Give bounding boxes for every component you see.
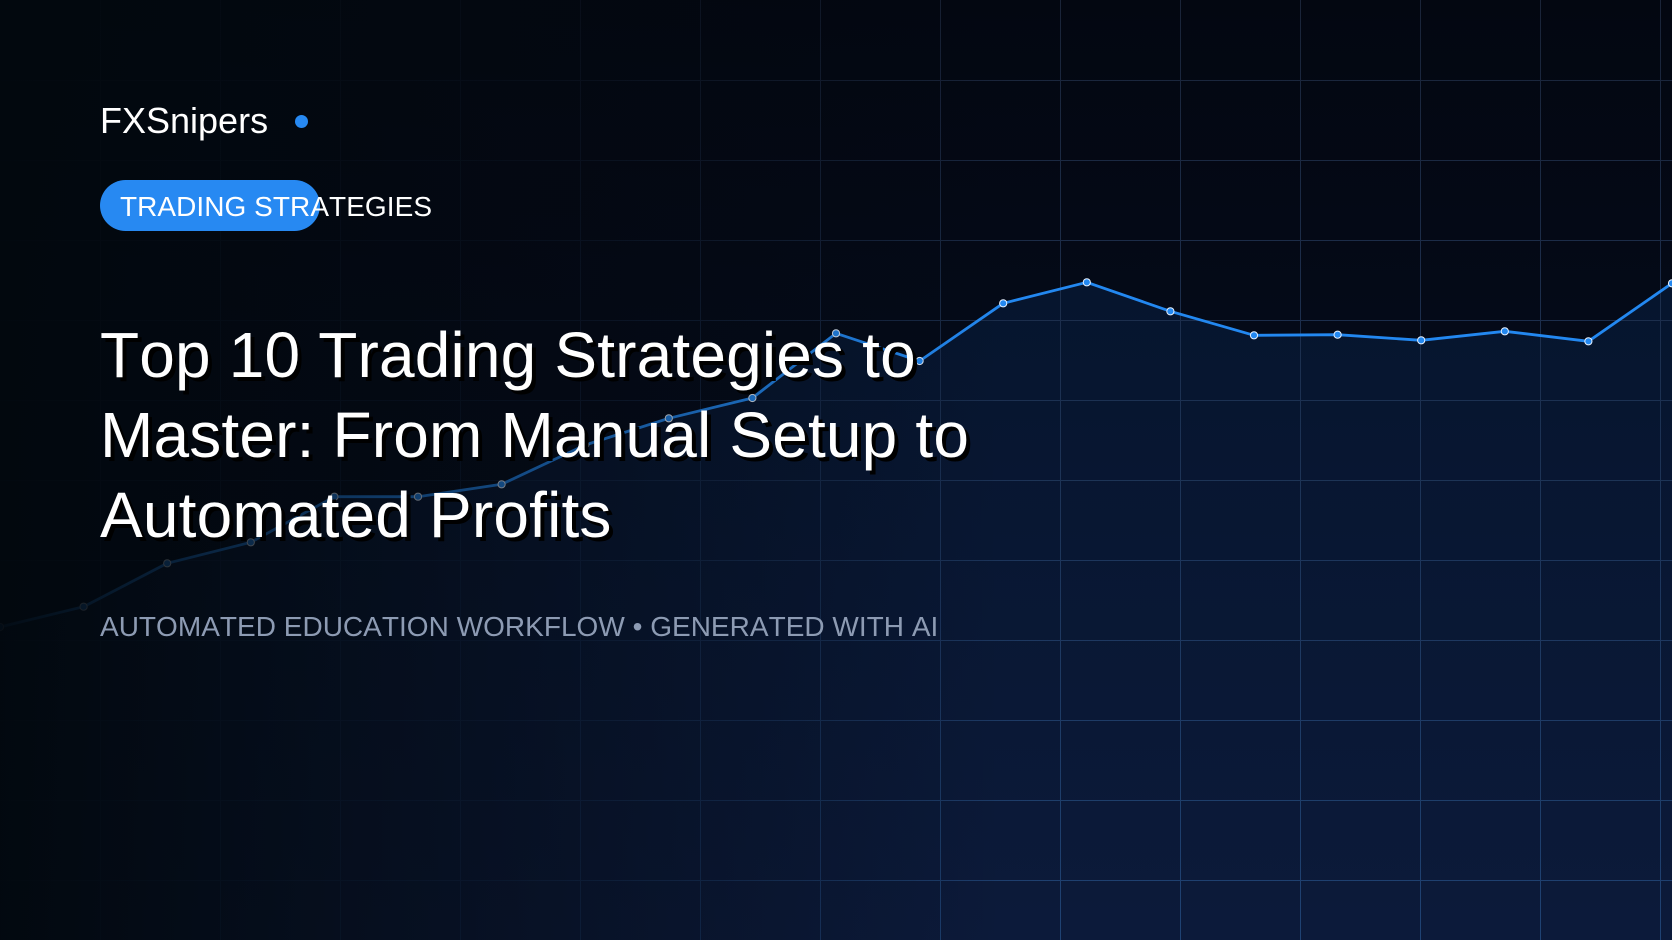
title: Master: From Manual Setup to xyxy=(100,399,969,471)
icon: brand dot xyxy=(295,115,308,128)
subtitle: AUTOMATED EDUCATION WORKFLOW • GENERATED WITH AI xyxy=(100,611,938,642)
title: Top 10 Trading Strategies to xyxy=(100,319,916,391)
category pill xyxy=(100,180,320,231)
title xyxy=(100,319,970,551)
brand name: FXSnipers xyxy=(100,100,268,141)
title: Automated Profits xyxy=(100,479,612,551)
area under line xyxy=(0,282,1672,940)
price line xyxy=(0,282,1672,627)
category label: TRADING STRATEGIES xyxy=(120,191,432,222)
data points xyxy=(0,279,1672,631)
